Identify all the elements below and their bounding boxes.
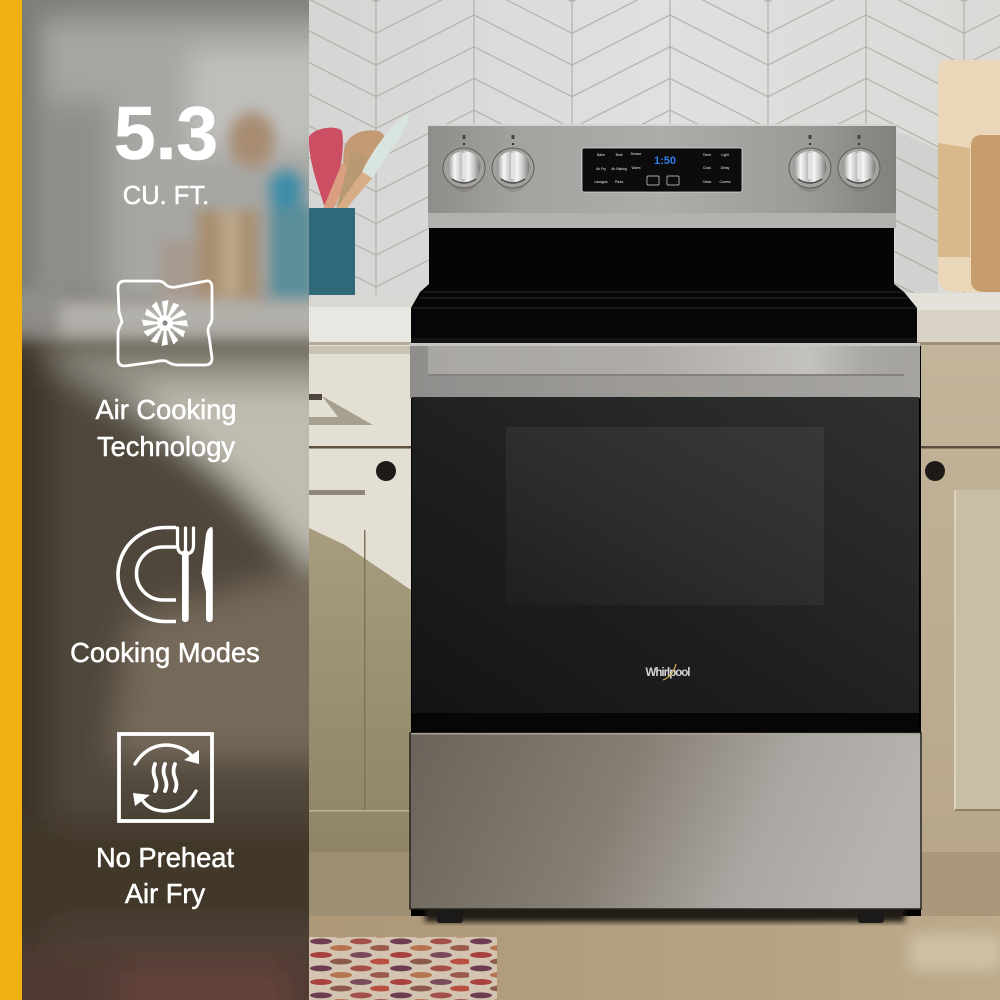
handle band [410, 343, 920, 398]
digital display: Bake [597, 153, 605, 157]
countertops [309, 293, 1000, 346]
patterned rug [309, 937, 497, 1000]
digital display: Control [720, 180, 731, 184]
brand logo: Whirlpool [646, 667, 690, 679]
label: no preheat air fry [96, 842, 234, 909]
oven window [506, 427, 824, 605]
digital display: Pizza [615, 180, 623, 184]
knobs [443, 135, 880, 192]
digital display: Delay [721, 166, 730, 170]
digital display: Clean [703, 180, 712, 184]
label: no preheat air fry: Air Fry [125, 878, 206, 909]
tiled backsplash [309, 0, 1000, 300]
label: cooking modes: Cooking Modes [70, 637, 260, 668]
feature: cooking modes [70, 527, 260, 668]
feature: no preheat air fry [96, 734, 234, 909]
photo background: kitchen scene [309, 0, 1000, 1000]
toe kick and floor [309, 852, 1000, 1000]
label: no preheat air fry: No Preheat [96, 842, 234, 873]
label: air cooking [95, 394, 237, 462]
digital display: Lasagna [594, 180, 608, 184]
digital display: Air Baking [611, 167, 627, 171]
utensil crock with spatulas [309, 113, 409, 296]
digital display: 1:50 [654, 155, 676, 167]
feature: capacity: 5.3 [114, 91, 218, 175]
range feet [437, 910, 884, 923]
digital display: Cook [703, 166, 711, 170]
cabinet knobs [376, 461, 945, 481]
digital display: Warm [632, 166, 641, 170]
storage drawer [410, 733, 921, 909]
left blurred panel [22, 0, 309, 1000]
icon: plate fork knife [118, 527, 213, 622]
feature: air cooking technology [95, 281, 237, 462]
yellow accent bar [0, 0, 22, 1000]
control panel [428, 124, 896, 228]
digital display [582, 148, 742, 192]
icon: steam with circular arrows [119, 734, 212, 821]
lower cabinets [309, 345, 1000, 852]
label: air cooking: Air Cooking [95, 394, 237, 425]
feature: capacity: CU. FT. [123, 182, 209, 210]
black back glass [429, 228, 894, 292]
range [410, 124, 921, 909]
oven door [412, 397, 919, 732]
digital display: Timer [703, 153, 712, 157]
label: air cooking: Technology [97, 431, 235, 462]
digital display: Broil [616, 153, 623, 157]
digital display: Sensor [631, 152, 642, 156]
digital display: Air Fry [596, 167, 606, 171]
cutting boards [938, 60, 1000, 292]
digital display: Light [721, 153, 729, 157]
cooktop [411, 284, 917, 343]
icon: fan in wavy frame [118, 281, 212, 366]
